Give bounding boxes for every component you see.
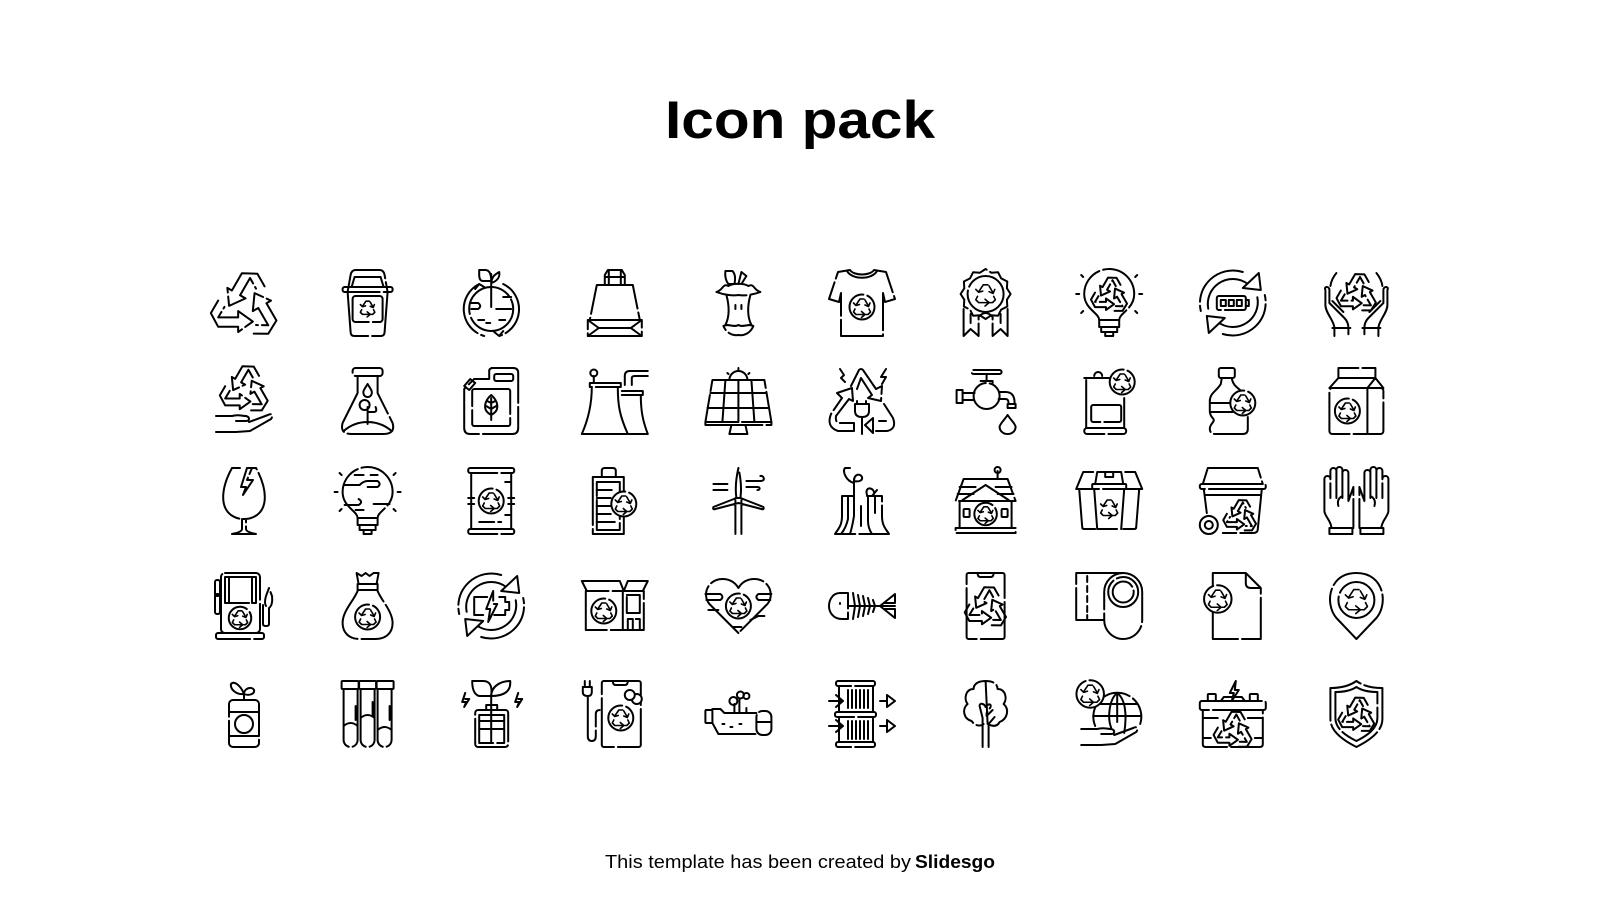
icon: apple core	[716, 271, 760, 335]
icon: plant battery	[462, 681, 522, 747]
icon: bottle with recycling badge	[1210, 368, 1255, 434]
icon: fish bone	[829, 593, 895, 619]
icon: battery charge cycle	[458, 573, 524, 639]
icon: can with recycling badge	[1084, 370, 1135, 434]
icon: jerry can with leaf	[464, 368, 518, 434]
icon: recycling with plug	[830, 369, 894, 434]
icon: milk carton	[1329, 368, 1383, 434]
icon: hand holding globe	[1076, 680, 1141, 745]
icon: gloves	[1324, 467, 1388, 534]
icon: phone with recycling	[965, 573, 1011, 639]
icon: earth heart	[705, 579, 771, 633]
icon: cooling towers	[582, 370, 648, 434]
icon: recycling bin	[343, 270, 393, 336]
icon: light bulb with recycling	[1076, 269, 1142, 336]
icon: recycling shield	[1330, 681, 1382, 747]
title: Icon pack	[665, 91, 936, 150]
icon: hand with recycling	[216, 360, 274, 432]
icon: solar panel	[705, 368, 771, 434]
icon: tree stump with sprout	[835, 468, 889, 534]
icon: paper roll	[1076, 573, 1142, 639]
icon: flask with sprout	[342, 368, 393, 434]
icon: broken wine glass	[223, 468, 265, 534]
icon: water filter	[829, 681, 895, 747]
icon: can with sprout	[229, 683, 259, 747]
icon: tree	[964, 681, 1007, 747]
icon: t-shirt	[829, 270, 895, 336]
icon: recycling boxes	[582, 581, 648, 630]
icon: recycling triangle	[211, 264, 285, 340]
icon: wheelie bin	[1200, 468, 1266, 534]
icon: car battery	[1200, 681, 1266, 750]
icon: hands holding recycling	[1325, 269, 1388, 336]
icon: award badge	[961, 269, 1011, 336]
icon: recycled document	[1204, 573, 1261, 639]
icon: water tap	[957, 370, 1016, 434]
icon: test tubes	[342, 681, 394, 747]
icon: globe with sprout	[464, 270, 519, 336]
icon: wind turbine	[713, 468, 764, 534]
icon: three bins	[1076, 472, 1142, 529]
icon: eco house	[956, 467, 1016, 533]
icon: phone with plug	[583, 681, 642, 747]
icon: battery with recycling	[593, 468, 636, 534]
icon: battery recycling cycle	[1200, 270, 1266, 336]
footer credit: This template has been created by	[605, 852, 911, 872]
footer credit: Slidesgo	[915, 852, 995, 872]
icon: bottle with plants	[705, 692, 771, 735]
icon: fuel pump	[215, 573, 272, 639]
icon: oil barrel	[468, 468, 514, 534]
icon: shopping bag	[588, 270, 642, 336]
icon: location pin	[1330, 573, 1383, 639]
icon: garbage sack	[343, 573, 393, 639]
icon: globe light bulb	[335, 467, 401, 534]
